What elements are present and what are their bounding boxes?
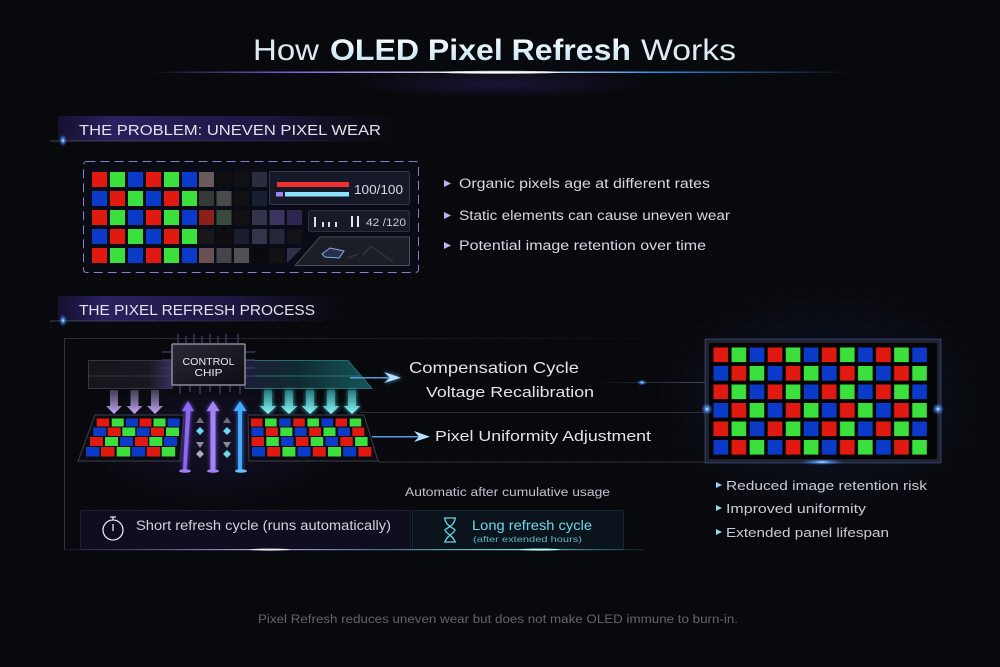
arrow: to compensation cycle bbox=[350, 372, 401, 383]
icon: hourglass bbox=[444, 518, 456, 542]
pixel array: left bbox=[78, 415, 184, 461]
panel: uneven pixel wear bbox=[84, 162, 418, 272]
meter: 42/120 bbox=[308, 210, 410, 232]
bullets: benefits: Reduced image retention risk bbox=[726, 478, 928, 493]
arrows: teal down bbox=[260, 390, 360, 414]
title: How bbox=[253, 34, 319, 67]
bullets: benefits bbox=[716, 478, 928, 540]
text: automatic after cumulative usage: Automatic after cumulative usage bbox=[405, 487, 610, 499]
control chip: CONTROL bbox=[182, 356, 235, 368]
bullets: problem: Organic pixels age at different rates bbox=[459, 176, 710, 191]
text: pixel uniformity adjustment: Pixel Uniformity Adjustment bbox=[435, 428, 652, 445]
healthy pixel grid bbox=[92, 172, 197, 263]
text: compensation cycle: Compensation Cycle bbox=[409, 360, 579, 377]
arrows: purple down bbox=[106, 390, 163, 414]
arrow: to pixel uniformity bbox=[372, 431, 430, 442]
meter: 42/120: 42 /120 bbox=[366, 217, 406, 229]
signal band: right bbox=[245, 360, 372, 388]
title: OLED Pixel Refresh bbox=[330, 34, 631, 67]
pixel array: right bbox=[248, 415, 378, 461]
panel: refreshed pixel grid bbox=[701, 340, 944, 465]
bullets: benefits: Improved uniformity bbox=[726, 501, 867, 516]
section heading: the pixel refresh process: THE PIXEL REFRESH PROCESS bbox=[79, 302, 315, 319]
worn pixel grid bbox=[199, 172, 302, 263]
text: after extended hours: (after extended hours) bbox=[473, 534, 582, 544]
small diamond indicators bbox=[196, 417, 231, 458]
text: long refresh cycle: Long refresh cycle bbox=[472, 518, 592, 533]
process frame lines bbox=[64, 338, 705, 550]
text: short refresh cycle: Short refresh cycle (runs automatically) bbox=[136, 518, 391, 533]
bullets: problem: Potential image retention over time bbox=[459, 238, 706, 253]
panel: long refresh cycle bbox=[412, 510, 624, 550]
section heading: the problem bbox=[50, 116, 403, 146]
title glow line bbox=[150, 71, 850, 74]
text: voltage recalibration: Voltage Recalibration bbox=[426, 384, 594, 401]
bullets: problem: Static elements can cause uneven wear bbox=[459, 208, 731, 223]
bullets: benefits: Extended panel lifespan bbox=[726, 525, 889, 540]
control chip bbox=[162, 334, 255, 394]
icon panel: chip bbox=[295, 237, 410, 266]
footnote: Pixel Refresh reduces uneven wear but does not make OLED immune to burn-in. bbox=[258, 614, 738, 626]
title bbox=[253, 34, 736, 67]
bottom glow line bbox=[64, 549, 644, 551]
signal band: left bbox=[88, 360, 172, 388]
meter: 100/100 bbox=[270, 172, 410, 204]
icon: stopwatch bbox=[103, 517, 123, 540]
panel: short refresh cycle bbox=[80, 510, 410, 550]
section heading: the pixel refresh process bbox=[50, 296, 348, 326]
bullets: problem bbox=[444, 176, 731, 253]
section heading: the problem: THE PROBLEM: UNEVEN PIXEL WEAR bbox=[79, 122, 381, 139]
control chip: CHIP bbox=[194, 367, 222, 379]
arrows: vertical up bbox=[179, 401, 247, 473]
meter: 100/100: 100/100 bbox=[354, 182, 403, 197]
title: Works bbox=[641, 34, 736, 67]
